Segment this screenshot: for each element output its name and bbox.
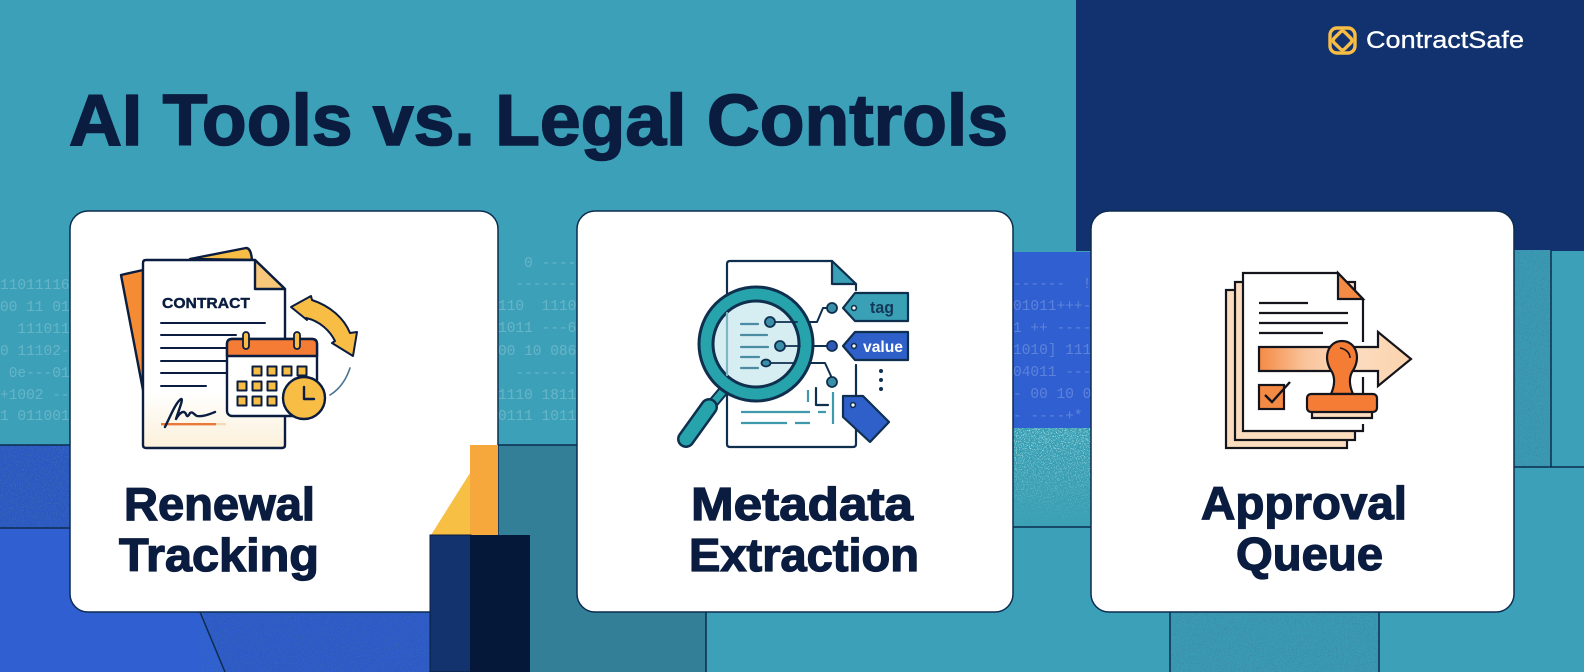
faint code texture left: 111011 [0, 322, 70, 338]
icon: contract with calendar [121, 248, 357, 448]
faint code texture left: 0e---01 [0, 366, 70, 382]
faint code texture middle [498, 256, 585, 425]
faint code texture left: 1 011001 [0, 409, 70, 425]
faint code texture middle: 1110 1811 [498, 388, 576, 404]
faint code texture right: - 00 10 0 [1013, 387, 1091, 403]
label [1201, 477, 1407, 580]
icon: magnifier with tags [686, 261, 908, 447]
faint code texture right: 1010] 111 [1013, 343, 1091, 359]
panel: renewal tracking [70, 211, 498, 612]
brand name: ContractSafe [1366, 27, 1524, 54]
faint code texture left: ---- [0, 256, 104, 272]
faint code texture middle: 110 1110 [498, 299, 576, 315]
icon: contract with calendar: CONTRACT [162, 295, 250, 312]
label: Approval [1201, 477, 1407, 529]
faint code texture middle: ------- [498, 366, 576, 382]
label: Queue [1236, 528, 1383, 580]
icon: document stack with stamp [1226, 273, 1411, 448]
label [119, 478, 319, 581]
faint code texture right: 04011 --- [1013, 365, 1091, 381]
label: Extraction [689, 529, 919, 581]
label [689, 478, 919, 581]
faint code texture left [0, 256, 104, 425]
faint code texture middle: 0 ----- [498, 256, 585, 272]
faint code texture middle: 00 10 086 [498, 344, 576, 360]
decorative gold and navy column [430, 445, 530, 672]
label: Metadata [691, 478, 913, 530]
faint code texture left: 00 11 01 [0, 300, 70, 316]
label: Tracking [119, 529, 319, 581]
icon: magnifier with tags: value [863, 339, 903, 356]
faint code texture left: 0 11102- [0, 344, 70, 360]
title: AI Tools vs. Legal Controls [69, 81, 1008, 161]
faint code texture right: 01011+++- [1013, 299, 1091, 315]
logo [1330, 27, 1524, 54]
faint code texture left: +1002 -- [0, 388, 70, 404]
faint code texture right: ------ ! [1013, 277, 1091, 293]
faint code texture middle: ------- [498, 277, 576, 293]
icon: magnifier with tags: tag [870, 298, 894, 317]
faint code texture middle: 0111 1011 [498, 409, 576, 425]
faint code texture right: - ----+* [1013, 409, 1083, 425]
faint code texture middle: 1011 ---6 [498, 321, 576, 337]
icon: logo mark [1330, 28, 1355, 53]
faint code texture right [1013, 277, 1091, 425]
panel: approval queue [1091, 211, 1514, 612]
faint code texture right: 1 ++ ---- [1013, 321, 1091, 337]
label: Renewal [124, 478, 315, 530]
faint code texture left: 11011116 [0, 278, 70, 294]
panel: metadata extraction [577, 211, 1013, 612]
